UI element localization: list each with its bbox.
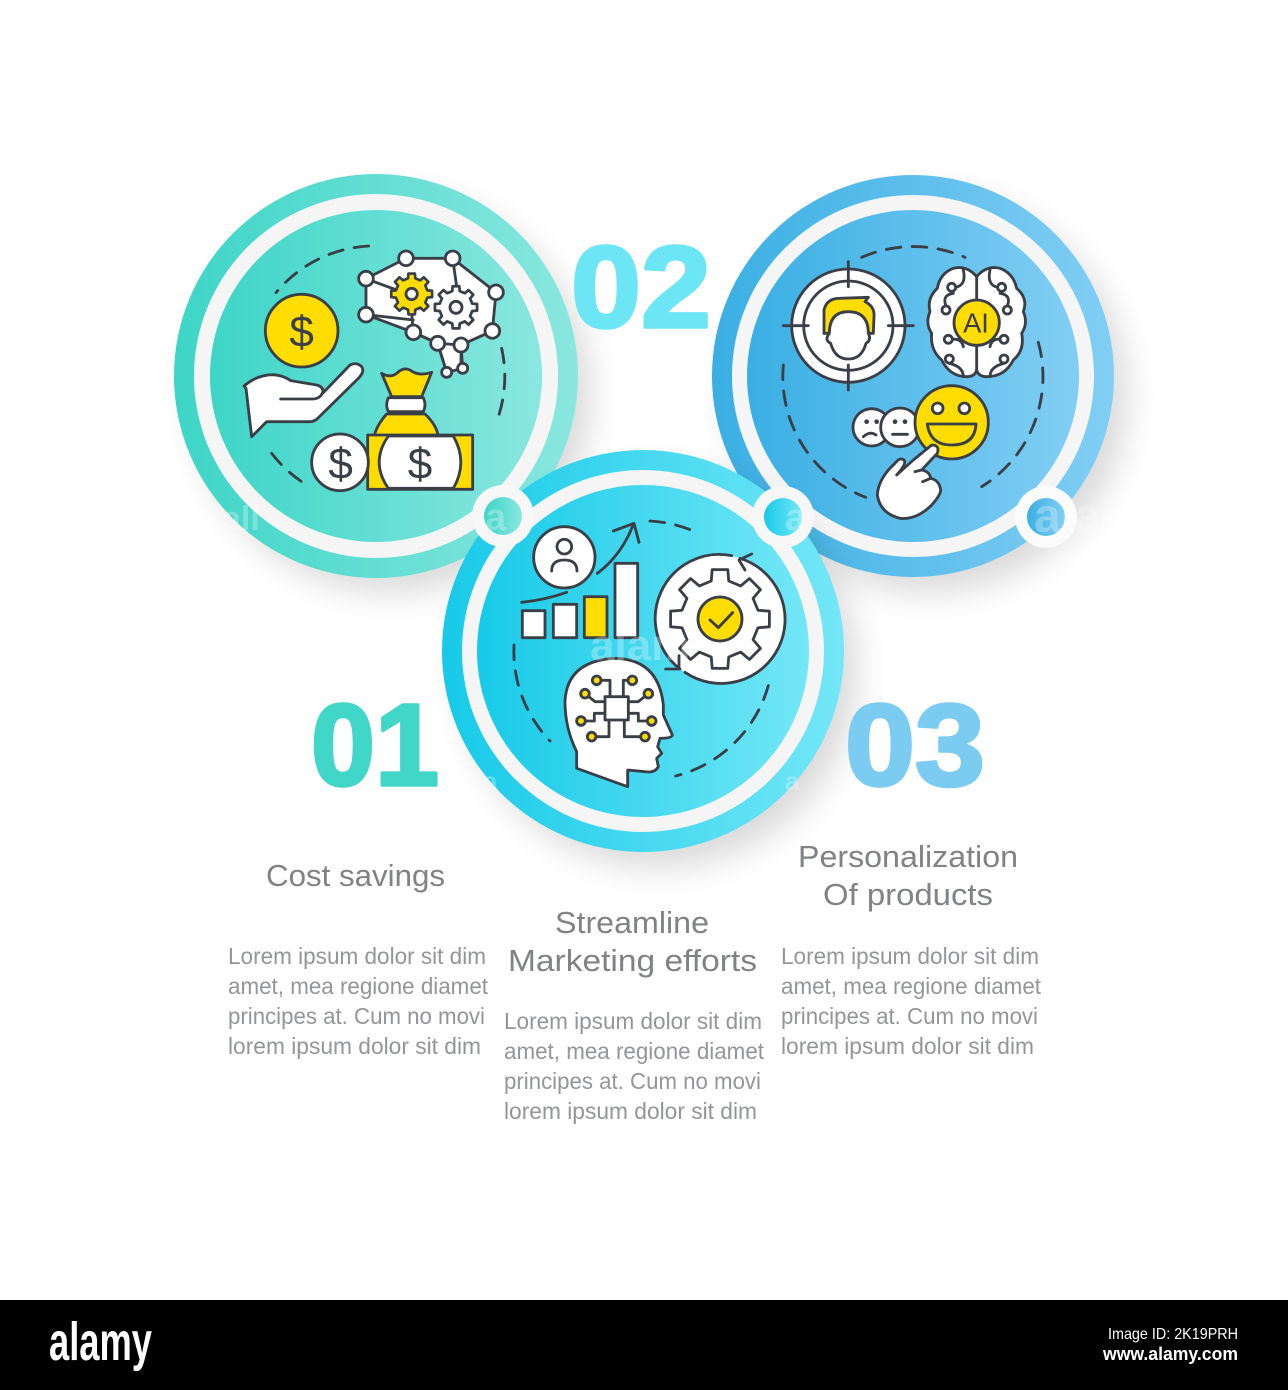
footer bar	[0, 1300, 1288, 1390]
text block: personalization: amet, mea regione diamet	[781, 973, 1042, 999]
heading: streamline marketing efforts: Marketing efforts	[508, 943, 757, 978]
text block: personalization	[781, 943, 1042, 1059]
icon: coin above hand	[265, 294, 338, 367]
heading: streamline marketing efforts: Streamline	[555, 905, 709, 940]
icon: coin above hand: $	[289, 308, 314, 357]
heading: personalization of products: Personalization	[798, 839, 1018, 874]
watermark marks	[222, 490, 1170, 796]
text block: streamline marketing: amet, mea regione diamet	[504, 1038, 765, 1064]
panel: personalization circle	[712, 175, 1127, 592]
footer logo: alamy	[49, 1312, 152, 1372]
watermark marks: alamy	[1034, 490, 1170, 543]
icon group: personalization	[783, 247, 1043, 518]
text block: streamline marketing: Lorem ipsum dolor sit dim	[504, 1008, 762, 1034]
icon: head with circuit	[565, 658, 672, 787]
dashed arc right	[982, 342, 1043, 487]
text block: cost savings: Lorem ipsum dolor sit dim	[228, 943, 486, 969]
panel: cost savings circle	[174, 174, 590, 592]
dashed arc left	[783, 365, 866, 497]
panel: streamline marketing circle	[442, 450, 857, 867]
footer image id: Image ID: 2K19PRH	[1108, 1326, 1238, 1343]
text block: cost savings: amet, mea regione diamet	[228, 973, 489, 999]
heading: personalization of products	[798, 839, 1018, 912]
icon: AI brain: AI	[963, 308, 989, 339]
dashed arc right	[676, 686, 768, 776]
number 02: 02	[571, 222, 711, 352]
heading: personalization of products: Of products	[823, 877, 993, 912]
text block: personalization: principes at. Cum no movi	[781, 1003, 1038, 1029]
icon: neutral and sad faces	[853, 408, 919, 447]
icon: banknote: $	[408, 439, 432, 488]
icon group: streamline marketing	[514, 521, 785, 787]
dashed arc right	[496, 348, 505, 423]
icon: money bag	[374, 369, 438, 437]
dashed arc top left	[276, 246, 369, 293]
watermark marks: a	[483, 766, 498, 796]
text block: cost savings	[228, 943, 489, 1059]
text block: streamline marketing	[504, 1008, 765, 1124]
text block: cost savings: lorem ipsum dolor sit dim	[228, 1033, 481, 1059]
watermark marks: a	[785, 497, 807, 539]
footer url: www.alamy.com	[1102, 1344, 1238, 1364]
icon: growth arrow	[522, 523, 639, 602]
icon group: cost savings	[244, 246, 505, 491]
icon: target with face	[783, 262, 913, 390]
icon: AI brain	[928, 268, 1025, 377]
icon: person badge	[534, 527, 595, 588]
text block: streamline marketing: principes at. Cum no movi	[504, 1068, 761, 1094]
icon: brain network with gears	[359, 251, 503, 377]
watermark marks: alam	[590, 621, 690, 670]
icon: happy face	[915, 386, 988, 459]
heading: streamline marketing efforts	[508, 905, 757, 978]
icon: pointing hand	[877, 445, 941, 518]
watermark marks: all	[222, 500, 260, 538]
connector dot: teal	[472, 485, 534, 547]
dashed arc bottom left	[272, 453, 303, 482]
connector dot: blue	[1015, 486, 1077, 548]
icon: white coin	[312, 434, 368, 491]
watermark marks: a	[785, 766, 800, 796]
connector dot: cyan	[752, 486, 814, 548]
text block: personalization: lorem ipsum dolor sit dim	[781, 1033, 1034, 1059]
number 03: 03	[845, 680, 985, 810]
dashed arc left	[514, 645, 550, 741]
number 01: 01	[311, 680, 439, 810]
dashed arc top	[862, 247, 965, 257]
bar chart	[522, 563, 638, 638]
text block: cost savings: principes at. Cum no movi	[228, 1003, 485, 1029]
dashed arc top	[650, 521, 695, 532]
icon: white coin: $	[328, 439, 353, 488]
icon: banknote	[368, 435, 473, 489]
icon: gear with check and cycle arrows	[655, 554, 785, 683]
text block: personalization: Lorem ipsum dolor sit dim	[781, 943, 1039, 969]
icon: open hand	[244, 364, 363, 437]
watermark marks: a	[485, 497, 507, 539]
heading: cost savings: Cost savings	[266, 858, 445, 893]
text block: streamline marketing: lorem ipsum dolor sit dim	[504, 1098, 757, 1124]
